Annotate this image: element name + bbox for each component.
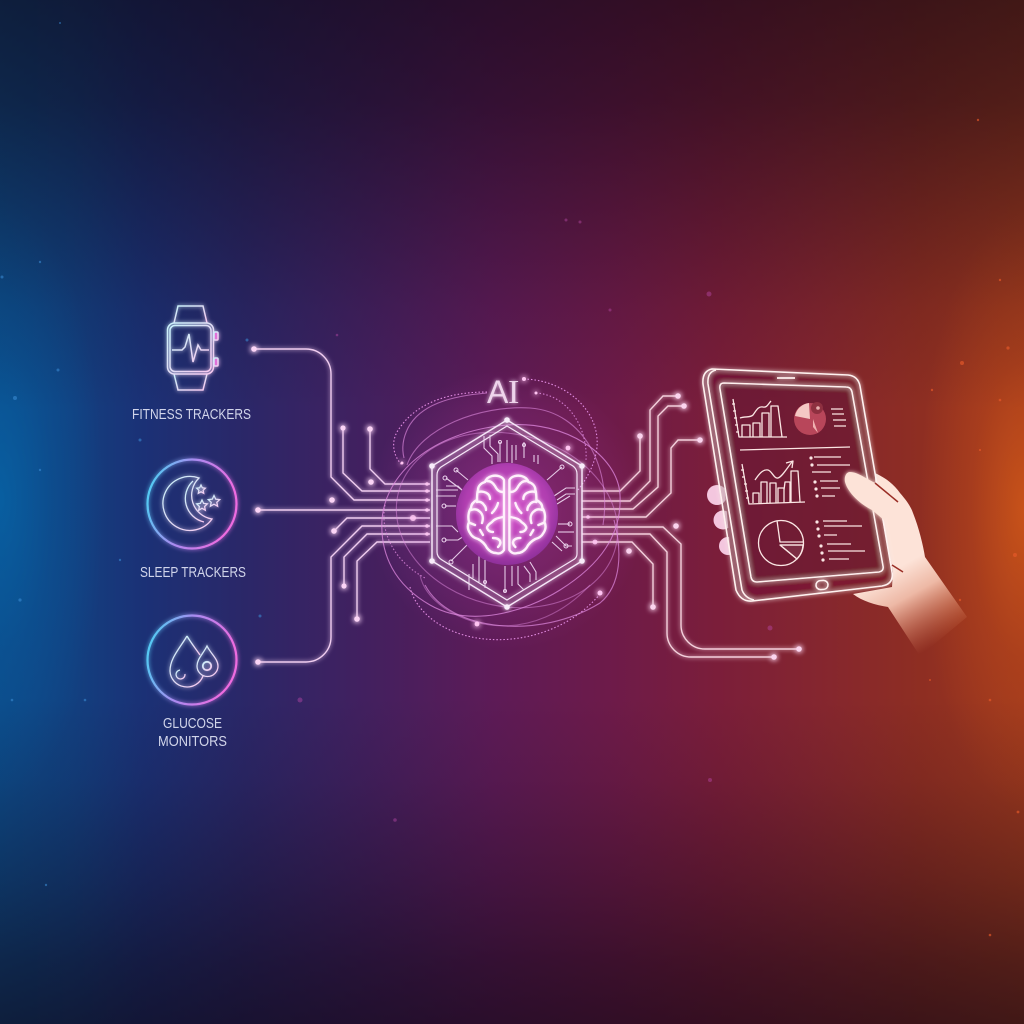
panel: tablet and hand — [703, 369, 967, 656]
label: AI: I — [508, 374, 519, 411]
hand details — [875, 483, 903, 572]
connector lines: right — [582, 396, 799, 657]
icon: fitness watch — [168, 306, 218, 390]
inner circuit traces — [436, 435, 575, 592]
chart: middle bars — [741, 461, 805, 504]
connector nodes: left — [251, 346, 374, 665]
icon: sleep tracker — [148, 460, 236, 548]
label: glucose monitors — [158, 716, 227, 750]
list rows — [812, 409, 865, 559]
label: sleep trackers: SLEEP TRACKERS — [140, 565, 246, 581]
orbit rings — [378, 379, 636, 640]
label: glucose monitors: GLUCOSE — [163, 716, 222, 732]
chart: top pie — [794, 402, 826, 435]
hexagon frame — [432, 420, 582, 607]
icon: brain — [468, 476, 545, 553]
brain disc — [456, 463, 558, 565]
divider — [740, 447, 850, 450]
tablet body — [703, 369, 892, 601]
panel: wearable sources — [132, 306, 251, 750]
chart: lower pie — [758, 520, 804, 566]
panel: AI core — [367, 370, 647, 650]
chart: top bars — [732, 399, 787, 437]
connector lines: left — [254, 349, 430, 662]
label: glucose monitors: MONITORS — [158, 734, 227, 750]
list bullets — [809, 456, 825, 562]
hand palm — [853, 473, 967, 656]
icon: glucose drops — [148, 616, 236, 704]
chip pins — [410, 482, 597, 544]
tablet charts — [732, 399, 865, 566]
label: fitness trackers: FITNESS TRACKERS — [132, 407, 251, 423]
hexagon corner nodes — [429, 417, 585, 610]
glowing sparkles — [400, 377, 602, 626]
label: AI: A — [487, 374, 509, 410]
hand thumb — [845, 472, 900, 520]
hand fingers — [707, 485, 730, 555]
inner circuit pads — [442, 440, 572, 592]
core glow — [367, 370, 647, 650]
connector nodes: right — [626, 393, 802, 660]
